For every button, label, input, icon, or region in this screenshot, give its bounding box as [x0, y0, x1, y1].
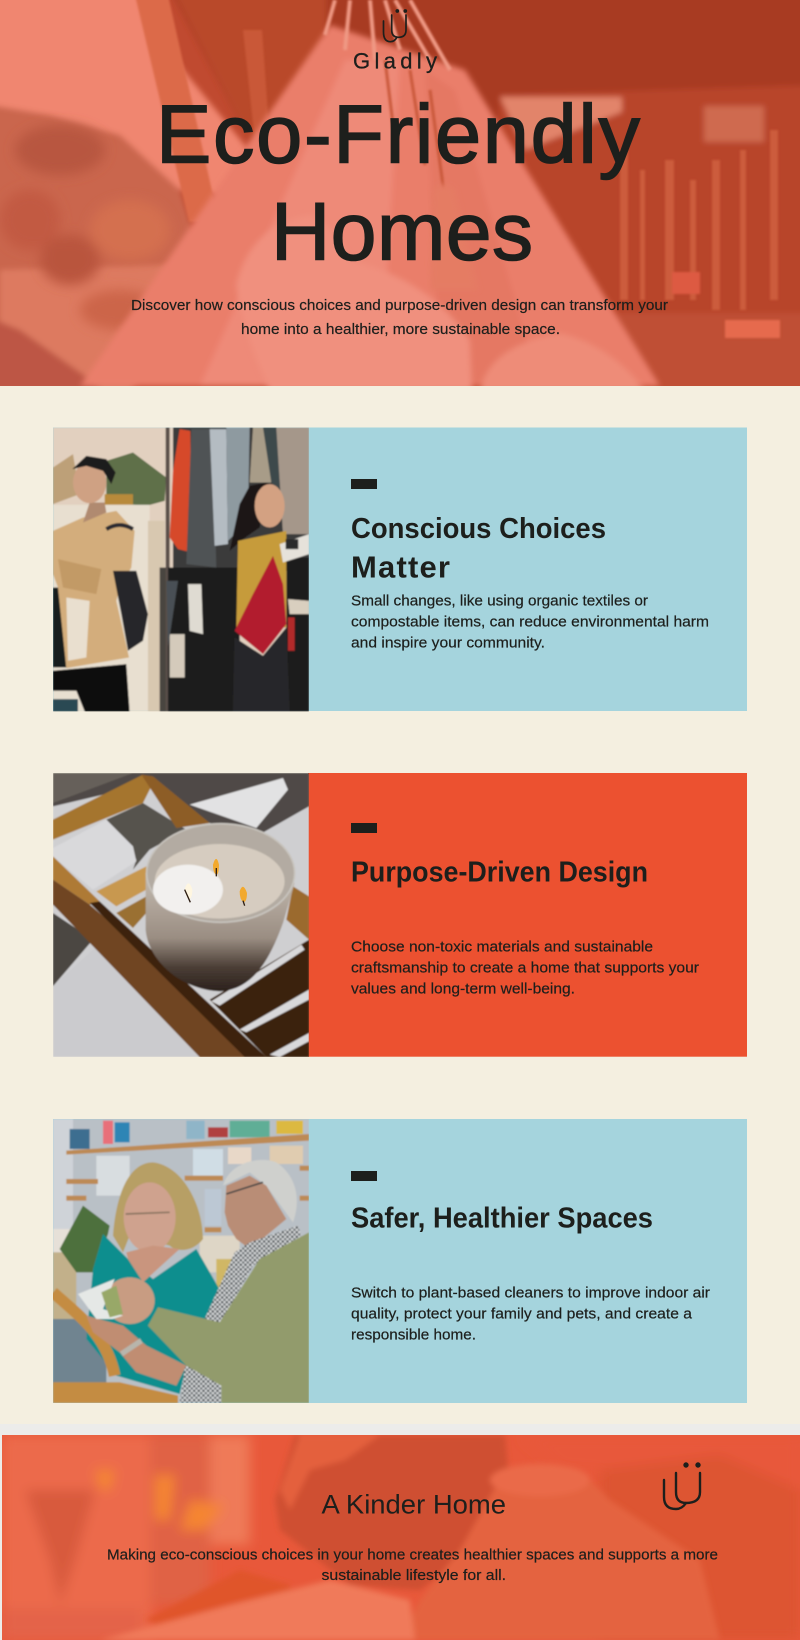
photo: candle on wooden bath tray	[53, 773, 309, 1057]
panel: footer	[2, 1435, 800, 1640]
foliage mottling	[0, 125, 170, 330]
panel: conscious choices	[53, 428, 747, 711]
icon: logo mark	[384, 10, 406, 42]
accent bar	[351, 479, 377, 489]
title: Eco-Friendly	[156, 88, 640, 180]
panel background	[308, 773, 747, 1057]
panel background	[53, 1119, 747, 1403]
body text: and inspire your community.	[351, 634, 545, 651]
panel: safer, healthier spaces	[53, 1119, 747, 1403]
panel background	[53, 428, 747, 711]
photo: shoppers at clothing rack	[53, 428, 309, 711]
title: Homes	[271, 186, 533, 278]
photo: couple reading a product label	[53, 1119, 309, 1403]
body text	[351, 593, 709, 651]
logo	[353, 10, 437, 74]
footer text	[107, 1546, 718, 1584]
footer photo: person resting with orange overlay	[2, 1435, 800, 1640]
bamboo post	[135, 0, 219, 222]
body text: Small changes, like using organic textiles or	[351, 593, 648, 610]
title	[162, 102, 641, 262]
hammock ropes	[325, 0, 450, 70]
accent bar	[351, 1171, 377, 1181]
body text: Choose non-toxic materials and sustainable	[351, 939, 653, 956]
hammock	[80, 25, 660, 386]
body text: quality, protect your family and pets, and create a	[351, 1305, 693, 1322]
heading	[351, 513, 606, 584]
footer text: Making eco-conscious choices in your home creates healthier spaces and supports a more	[107, 1546, 718, 1563]
logo wordmark: Gladly	[353, 48, 437, 74]
footer heading: A Kinder Home	[322, 1489, 506, 1519]
hero photo: hammock with orange overlay	[0, 0, 800, 400]
body text: compostable items, can reduce environmental harm	[351, 614, 709, 631]
body text: values and long-term well-being.	[351, 980, 575, 997]
icon: logo mark	[664, 1464, 700, 1509]
body text	[351, 1284, 710, 1343]
heading: Matter	[351, 550, 450, 584]
blanket and leg	[236, 184, 645, 390]
heading: Conscious Choices	[351, 513, 606, 545]
body text: craftsmanship to create a home that supports your	[351, 960, 699, 977]
panel: purpose-driven design	[53, 773, 747, 1057]
right building stripes	[620, 130, 780, 338]
footer text: sustainable lifestyle for all.	[322, 1567, 506, 1584]
footer band edge	[0, 1424, 800, 1640]
subtitle: Discover how conscious choices and purpose-driven design can transform your	[131, 297, 668, 314]
subtitle: home into a healthier, more sustainable space.	[241, 321, 560, 338]
hero panel	[0, 0, 800, 400]
heading: Safer, Healthier Spaces	[351, 1203, 653, 1235]
body text: responsible home.	[351, 1326, 476, 1343]
heading: Purpose-Driven Design	[351, 857, 648, 889]
subtitle	[131, 297, 668, 338]
accent bar	[351, 823, 377, 833]
body text	[351, 939, 699, 997]
body text: Switch to plant-based cleaners to improve indoor air	[351, 1284, 710, 1301]
